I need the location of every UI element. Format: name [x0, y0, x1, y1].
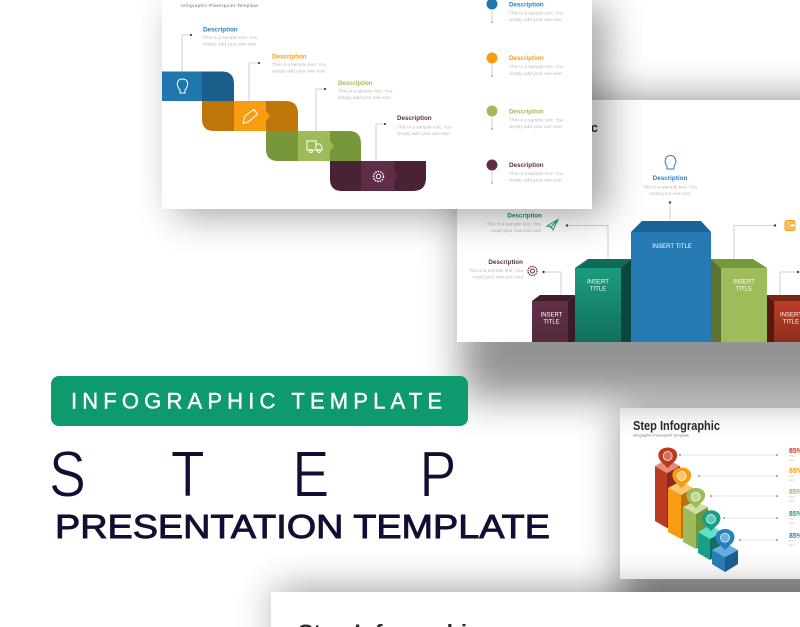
percentage captions: This i — [789, 495, 796, 499]
ribbon step 4: maroon — [330, 161, 426, 191]
description: maroon: could your own text and — [472, 274, 523, 280]
map pin: blue — [716, 529, 734, 550]
icon: truck — [307, 141, 322, 152]
slide title: Step Infographic — [633, 419, 720, 433]
list item: orange: This is a sample text. You — [509, 64, 564, 70]
description 2: This is a sample text. You — [272, 62, 327, 68]
description 4: simply add your own text — [397, 131, 450, 137]
clipped slide title: Step Infographic — [495, 120, 598, 135]
isometric column: orange — [668, 481, 693, 539]
description: teal: could your own text and — [490, 228, 541, 234]
description 1: This is a sample text. You — [203, 35, 258, 41]
description: top blue: Description — [653, 175, 687, 182]
description: maroon — [469, 259, 523, 280]
badge: infographic template — [51, 376, 468, 426]
ribbon step 1: blue — [162, 72, 234, 101]
percentage labels — [789, 448, 800, 540]
description 4: This is a sample text. You — [397, 124, 452, 130]
map pin: red — [658, 448, 677, 468]
description 4 — [397, 115, 452, 137]
description: maroon: This is a sample text. You — [469, 268, 523, 274]
isometric column: red — [655, 459, 680, 530]
bar: green — [711, 259, 767, 342]
isometric column: blue — [712, 543, 738, 572]
list item: blue: simply add your own text — [509, 17, 562, 23]
bar: green: INSERT — [733, 280, 755, 286]
description 4: Description — [397, 115, 432, 122]
map pin: teal — [702, 510, 720, 531]
map pin: green — [686, 488, 705, 508]
icon: pencil — [243, 110, 258, 124]
panel: isometric step slide — [620, 408, 800, 582]
isometric column: green — [683, 501, 708, 549]
percentage captions — [789, 454, 796, 547]
heading: STEP: STEP — [49, 437, 456, 511]
percentage captions: text r — [789, 458, 795, 462]
bar: red: TITLE — [783, 320, 799, 326]
list item: blue: This is a sample text. You — [509, 10, 564, 16]
list item: maroon: simply add your own text — [509, 178, 562, 184]
list item: green: Description — [509, 108, 544, 116]
panel: ribbon step slide — [162, 0, 592, 209]
bar: maroon: TITLE — [543, 320, 560, 326]
description: top blue: could your own text — [649, 191, 691, 197]
bar: blue: INSERT TITLE — [652, 244, 692, 250]
list item: green: simply add your own text — [509, 124, 562, 130]
leader dots — [190, 34, 386, 125]
percentage captions: This i — [789, 517, 796, 521]
bar: teal — [575, 259, 631, 342]
bar: red — [767, 295, 800, 342]
bar: maroon: INSERT — [541, 312, 563, 318]
percentage captions: text r — [789, 478, 795, 482]
badge: infographic template: INFOGRAPHIC TEMPLATE — [71, 388, 442, 414]
description: teal — [487, 212, 542, 234]
description 2: simply add your own text — [272, 68, 325, 74]
icon: gear — [528, 266, 537, 276]
description: teal: Description — [507, 212, 542, 220]
bar: teal: TITLE — [590, 286, 606, 292]
slide subtitle: Infographic Powerpoint Template — [633, 434, 689, 438]
panel: 3D bar slide — [457, 98, 800, 348]
percentage captions: This i — [789, 539, 796, 543]
ribbon step 3: green — [266, 131, 361, 161]
percentage captions: text r — [789, 499, 795, 503]
list item: orange — [486, 52, 564, 77]
description 1 — [203, 26, 258, 48]
description 3: simply add your own text — [338, 95, 391, 101]
bar: green: TITLE — [736, 286, 752, 292]
list item: maroon — [486, 160, 564, 184]
bar: blue — [631, 221, 711, 342]
list item: maroon: This is a sample text. You — [509, 171, 564, 177]
description 1: Description — [203, 26, 238, 34]
list item: green — [486, 106, 564, 130]
ribbon step 2: orange — [202, 101, 298, 131]
description 3: This is a sample text. You — [338, 88, 393, 94]
percentage captions: This i — [789, 474, 796, 478]
map pin: orange — [672, 468, 691, 488]
percentage captions: This i — [789, 454, 796, 458]
list item: maroon: Description — [509, 162, 544, 169]
icon: bulb — [177, 79, 188, 93]
list item: blue: Description — [509, 2, 544, 8]
description: top blue — [643, 175, 698, 197]
leader lines — [543, 202, 798, 295]
description 2: Description — [272, 54, 307, 60]
description 2 — [272, 54, 327, 74]
list item: blue — [486, 0, 564, 23]
description: teal: This is a sample text. You — [487, 222, 541, 228]
description 3: Description — [338, 80, 373, 87]
description: top blue: This is a sample text. You — [643, 184, 698, 190]
list item: green: This is a sample text. You — [509, 118, 564, 124]
list item: orange: simply add your own text — [509, 71, 562, 77]
description 3 — [338, 80, 393, 101]
leader lines — [182, 35, 385, 161]
description 1: simply add your own text — [203, 42, 256, 48]
leader dots — [542, 201, 799, 273]
isometric column: teal — [698, 525, 722, 560]
panel: clipped bottom slide — [271, 592, 800, 627]
icon: gear — [374, 172, 384, 182]
percentage captions: text r — [789, 521, 795, 525]
icon: paper plane — [547, 220, 558, 230]
description: maroon: Description — [488, 259, 523, 266]
icon: bulb — [665, 156, 676, 169]
bar: maroon — [532, 295, 575, 342]
dotted leader lines — [679, 454, 778, 541]
icon: wallet — [785, 220, 795, 230]
bar: teal: INSERT — [587, 280, 609, 286]
list item: orange: Description — [509, 55, 544, 62]
percentage captions: text r — [789, 543, 795, 547]
heading: presentation template: PRESENTATION TEMPLATE — [55, 509, 550, 546]
slide subtitle: Infographic Powerpoint Template — [181, 3, 258, 9]
